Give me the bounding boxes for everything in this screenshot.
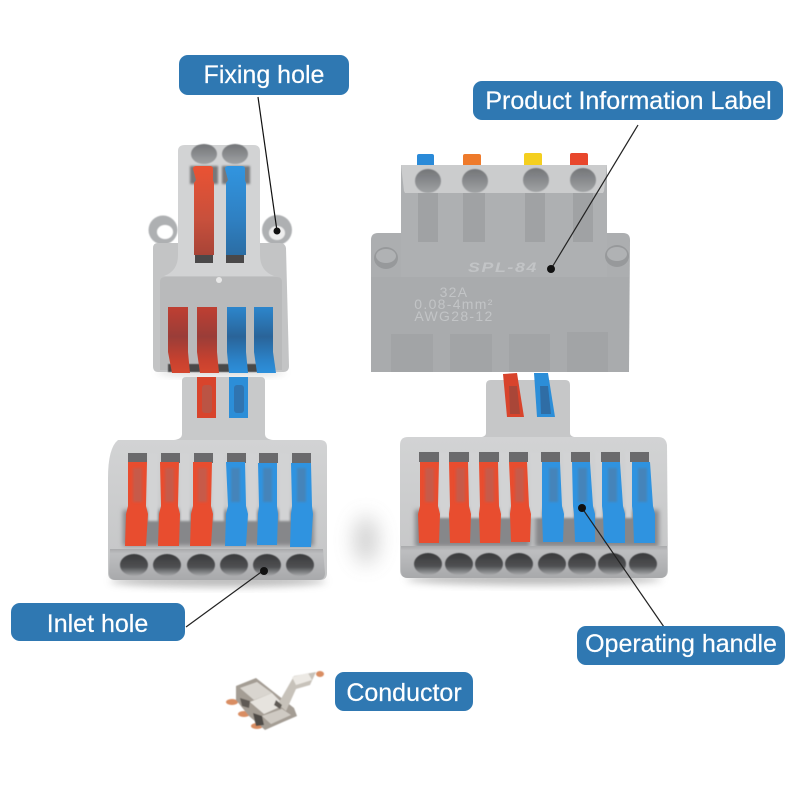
- inlet holes: six-way: [120, 554, 314, 576]
- connector: 4-way, rear view with product label: [371, 153, 630, 372]
- label: fixing hole: [179, 55, 349, 95]
- embossed ratings: 0.08-4mm²: [414, 296, 494, 312]
- leader line: inlet hole: [186, 567, 268, 627]
- label: conductor: [335, 672, 473, 711]
- handles: inlet side: [197, 377, 248, 418]
- bottom recesses: [391, 332, 608, 372]
- mounting bolts: [374, 245, 629, 269]
- label: operating handle: [577, 626, 785, 665]
- dark well behind handles: [123, 510, 314, 546]
- label: fixing hole: Fixing hole: [204, 61, 324, 89]
- connector: 2-in 8-out, top view: [400, 373, 668, 585]
- connector: 2-in 4-out, front view: [148, 144, 292, 376]
- coloured push tabs: [417, 153, 588, 168]
- vertical slots: [418, 193, 593, 242]
- mounting ring: right: [262, 215, 292, 245]
- holes: [191, 144, 248, 164]
- operating handles: bottom: [168, 307, 276, 373]
- embossed ratings: AWG28-12: [414, 308, 494, 324]
- label: product information label: [473, 81, 783, 120]
- operating handles: top: [193, 166, 246, 255]
- mounting ring: left: [148, 216, 178, 244]
- label: product information label: Product Information Label: [485, 87, 772, 115]
- leader line: fixing hole: [258, 97, 280, 234]
- operating handles: eight-way: [418, 462, 655, 543]
- embossed ratings: 32A: [440, 284, 468, 300]
- label: conductor: Conductor: [346, 679, 462, 707]
- inlet band: [401, 546, 667, 578]
- conductor metal part: [226, 671, 324, 730]
- inlet holes: eight-way: [414, 553, 657, 575]
- dark well behind handles: [415, 510, 659, 547]
- label: inlet hole: Inlet hole: [47, 610, 148, 638]
- handles: inlet side: [503, 373, 555, 417]
- connector: 2-in 6-out, top view: [108, 377, 327, 587]
- label: inlet hole: [11, 603, 185, 641]
- operating handles: six-way: [125, 462, 313, 547]
- embossed ratings: [414, 284, 494, 324]
- leader line: product information label: [547, 125, 638, 273]
- label: operating handle: Operating handle: [585, 630, 777, 658]
- embossed model mark: SPL-84: [468, 259, 538, 275]
- inlet holes: [415, 168, 596, 193]
- leader line: operating handle: [578, 504, 664, 627]
- soft shadow between connectors: [354, 516, 378, 564]
- inlet band: [109, 549, 325, 580]
